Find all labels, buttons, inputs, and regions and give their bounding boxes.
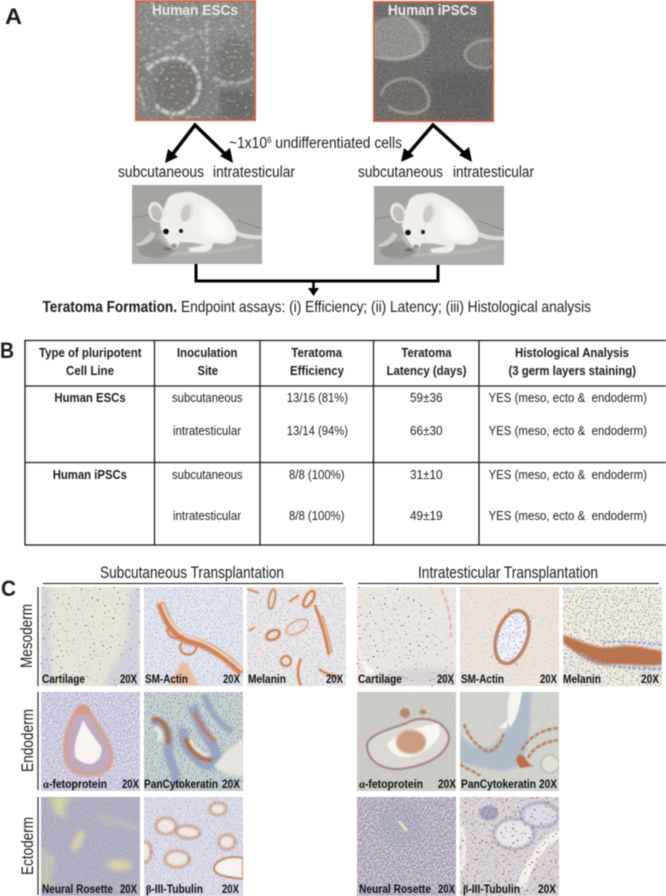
- table row: ESC intratesticular: 66±30: [410, 423, 443, 438]
- tile: intratesticular pancytokeratin: 20X: [539, 777, 557, 791]
- cell number label: ~1x10: [229, 135, 272, 152]
- table row: iPSC subcutaneous: 8/8 (100%): [289, 467, 344, 482]
- table row: iPSC subcutaneous: subcutaneous: [172, 467, 243, 482]
- panel A: experimental design: [5, 0, 591, 316]
- tile: intratesticular beta-III-tubulin: β-III-Tubulin: [463, 882, 520, 896]
- teratoma formation caption: Teratoma Formation.: [42, 299, 177, 316]
- tile: subcutaneous neural rosette: 20X: [120, 882, 137, 896]
- tile: intratesticular cartilage: 20X: [437, 672, 454, 686]
- tile: intratesticular alpha-fetoprotein: 20X: [438, 777, 456, 791]
- tile: intratesticular alpha-fetoprotein: α-fetoprotein: [359, 777, 423, 791]
- panel letter A: A: [5, 4, 22, 29]
- tile: intratesticular beta-III-tubulin: [460, 797, 559, 896]
- tile: subcutaneous pancytokeratin: PanCytokeratin: [144, 777, 218, 791]
- tile: subcutaneous SM-actin: [144, 587, 243, 686]
- arrows: ESC split: [165, 125, 233, 163]
- heading: subcutaneous transplantation: Subcutaneous Transplantation: [100, 564, 284, 582]
- table row: iPSC subcutaneous: [53, 467, 647, 482]
- tile: subcutaneous alpha-fetoprotein: 20X: [122, 777, 139, 791]
- panel letter C: C: [1, 576, 16, 601]
- tile: subcutaneous neural rosette: Neural Rosette: [42, 882, 113, 896]
- tile: subcutaneous alpha-fetoprotein: α-fetoprotein: [43, 777, 107, 791]
- table header: Site: [198, 363, 218, 378]
- panel C: histology: [1, 564, 662, 896]
- row label: mesoderm: Mesoderm: [18, 604, 36, 668]
- tile: intratesticular pancytokeratin: PanCytokeratin: [461, 777, 536, 791]
- tile: subcutaneous cartilage: 20X: [120, 672, 137, 686]
- label: subcutaneous (iPSC): subcutaneous: [358, 164, 443, 181]
- tile: subcutaneous beta-III-tubulin: β-III-Tubulin: [146, 882, 203, 896]
- tile: intratesticular neural rosette: 20X: [438, 882, 455, 896]
- cell number label: undifferentiated cells: [272, 135, 402, 152]
- teratoma formation caption: [42, 299, 591, 316]
- panel letter B: B: [0, 338, 14, 363]
- tile: intratesticular SM-actin: SM-Actin: [461, 672, 504, 686]
- label: subcutaneous (ESC): subcutaneous: [118, 164, 204, 181]
- tile: intratesticular cartilage: Cartilage: [358, 672, 402, 686]
- tile: subcutaneous beta-III-tubulin: 20X: [222, 882, 239, 896]
- tile: subcutaneous SM-actin: 20X: [223, 672, 240, 686]
- tile: subcutaneous melanin: 20X: [326, 672, 343, 686]
- tile: subcutaneous cartilage: [41, 587, 140, 686]
- tile: subcutaneous melanin: Melanin: [248, 672, 286, 686]
- tile: intratesticular cartilage: [357, 587, 456, 686]
- table row: ESC subcutaneous: subcutaneous: [172, 390, 243, 405]
- cell number label: 6: [267, 135, 272, 145]
- label: intratesticular (ESC): intratesticular: [213, 164, 295, 181]
- tile: intratesticular melanin: 20X: [641, 672, 659, 686]
- tile: subcutaneous alpha-fetoprotein: [41, 692, 140, 791]
- micrograph: human ESCs: [135, 0, 256, 121]
- table row: iPSC intratesticular: [173, 508, 647, 523]
- tile: subcutaneous pancytokeratin: 20X: [222, 777, 240, 791]
- table header: [39, 345, 636, 378]
- mouse photo right: [374, 186, 504, 265]
- tile: subcutaneous melanin: [247, 587, 346, 686]
- table header: Type of pluripotent: [39, 345, 142, 360]
- table row: iPSC intratesticular: 8/8 (100%): [289, 508, 344, 523]
- tile: intratesticular neural rosette: Neural Rosette: [359, 882, 431, 896]
- table row: iPSC subcutaneous: 31±10: [410, 467, 443, 482]
- table row: ESC subcutaneous: 59±36: [410, 390, 443, 405]
- tile: intratesticular SM-actin: 20X: [540, 672, 557, 686]
- image title: Human ESCs: [152, 2, 238, 19]
- tile: intratesticular melanin: [563, 587, 662, 686]
- table header: Teratoma: [291, 345, 343, 360]
- tile: intratesticular alpha-fetoprotein: [357, 692, 456, 791]
- table row: ESC subcutaneous: Human ESCs: [54, 390, 126, 405]
- arrows: iPSC split: [401, 125, 472, 162]
- row label: ectoderm: Ectoderm: [19, 817, 37, 875]
- row label: endoderm: Endoderm: [19, 709, 37, 772]
- table row: ESC intratesticular: intratesticular: [173, 423, 242, 438]
- table row: iPSC intratesticular: 49±19: [410, 508, 443, 523]
- tile: intratesticular melanin: Melanin: [563, 672, 601, 686]
- table header: (3 germ layers staining): [508, 363, 636, 378]
- table header: Cell Line: [66, 363, 114, 378]
- mouse photo left: [132, 185, 262, 264]
- table header: Latency (days): [387, 363, 466, 378]
- tile: intratesticular pancytokeratin: [460, 692, 559, 791]
- image title: Human iPSCs: [388, 2, 477, 19]
- tile: subcutaneous pancytokeratin: [144, 692, 243, 791]
- table header: Teratoma: [401, 345, 452, 360]
- tile: intratesticular beta-III-tubulin: 20X: [538, 882, 556, 896]
- tile: subcutaneous neural rosette: [41, 797, 140, 896]
- table row: ESC intratesticular: YES (meso, ecto & endoderm): [488, 423, 647, 438]
- tile: subcutaneous SM-actin: SM-Actin: [145, 672, 188, 686]
- table row: iPSC intratesticular: YES (meso, ecto & endoderm): [488, 508, 647, 523]
- table header: Efficiency: [290, 363, 345, 378]
- table row: ESC intratesticular: [173, 423, 647, 438]
- panel B: results table: [0, 338, 666, 545]
- tile: subcutaneous beta-III-tubulin: [139, 797, 243, 896]
- table row: ESC intratesticular: 13/14 (94%): [287, 423, 348, 438]
- table row: ESC subcutaneous: [54, 390, 647, 405]
- teratoma formation caption: Endpoint assays: (i) Efficiency; (ii) Latency; (iii) Histological analysis: [181, 299, 591, 316]
- tile: intratesticular neural rosette: [357, 797, 456, 896]
- label: intratesticular (iPSC): intratesticular: [453, 164, 534, 181]
- row label: ectoderm: [19, 797, 38, 895]
- table row: ESC subcutaneous: YES (meso, ecto & endoderm): [488, 390, 647, 405]
- table header: Inoculation: [177, 345, 238, 360]
- table row: iPSC subcutaneous: YES (meso, ecto & endoderm): [488, 467, 647, 482]
- table header: Histological Analysis: [515, 345, 629, 360]
- tile: subcutaneous cartilage: Cartilage: [42, 672, 85, 686]
- tile: intratesticular SM-actin: [460, 587, 559, 686]
- table grid: [25, 340, 666, 545]
- table row: ESC subcutaneous: 13/16 (81%): [287, 390, 348, 405]
- table row: iPSC subcutaneous: Human iPSCs: [53, 467, 127, 482]
- heading: intratesticular transplantation: Intratesticular Transplantation: [418, 564, 598, 582]
- micrograph: human iPSCs: [364, 1, 494, 122]
- bracket arrow joining mice: [196, 264, 438, 296]
- table row: iPSC intratesticular: intratesticular: [173, 508, 242, 523]
